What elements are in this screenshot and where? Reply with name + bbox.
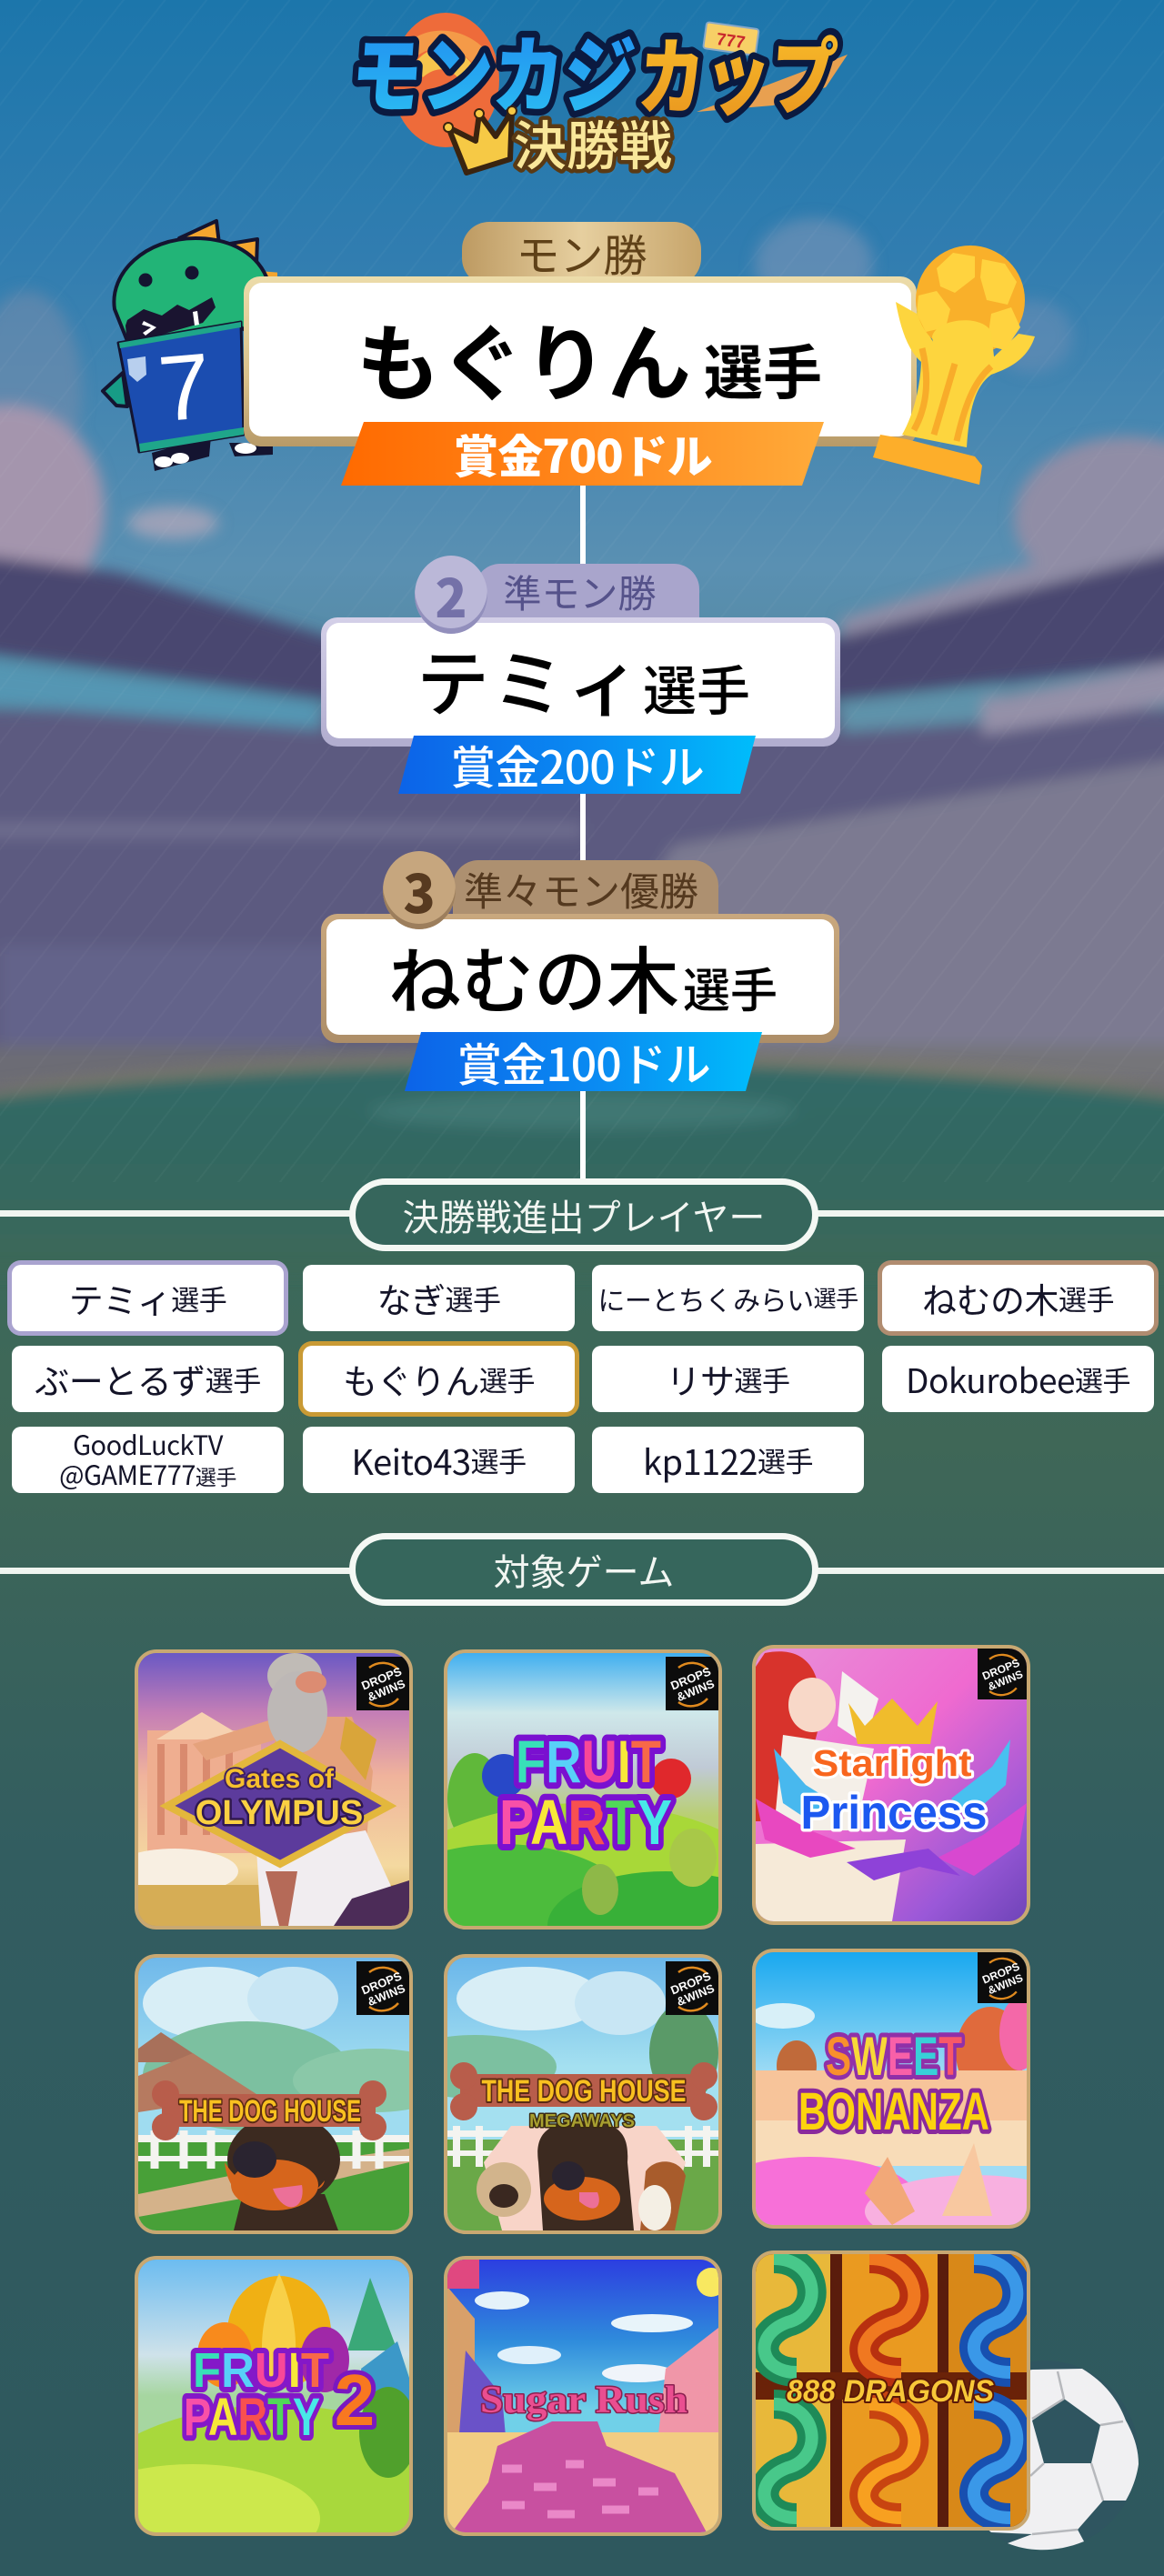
chip: Bootorozu: 選手 — [206, 1358, 261, 1399]
panel: finalist chips — [7, 1260, 1159, 1493]
badge: Drops & Wins: DROPS — [980, 1656, 1021, 1683]
third place name: ねむの木選手 — [388, 924, 778, 1029]
icon: gold trophy — [873, 246, 1035, 485]
chip: Risa — [592, 1346, 864, 1412]
chip: Nemunoki — [882, 1265, 1154, 1331]
game: Gates of Olympus: Gates of — [225, 1764, 335, 1794]
chip: Keito43: Keito43 — [351, 1435, 471, 1484]
logo slot reels: 777 — [715, 30, 747, 53]
heading: target games — [349, 1533, 818, 1606]
runner-up medal — [415, 556, 487, 634]
badge: Drops & Wins: &WINS — [675, 1677, 717, 1704]
winner prize banner — [341, 422, 824, 486]
badge: Drops & Wins — [356, 1657, 409, 1710]
game: The Dog House — [135, 1954, 413, 2234]
game: Fruit Party: FRUIT — [516, 1728, 661, 1795]
game: Sweet Bonanza — [752, 1949, 1030, 2229]
chip: Neetochiku Mirai — [592, 1265, 864, 1331]
chip: Risa: 選手 — [735, 1358, 789, 1399]
chip: Nemunoki: ねむの木 — [922, 1273, 1059, 1322]
third place prize banner: 賞金100ドル — [457, 1029, 710, 1095]
badge: Drops & Wins — [356, 1961, 409, 2015]
game: Starlight Princess — [752, 1645, 1030, 1925]
chip: Mogurin: 選手 — [479, 1358, 535, 1399]
game: The Dog House Megaways — [444, 1954, 722, 2234]
game: Sugar Rush: Sugar Rush — [480, 2380, 687, 2421]
chip: kp1122: 選手 — [758, 1439, 813, 1480]
chip: GoodLuckTV: GoodLuckTV — [73, 1424, 223, 1462]
chip: Temi: 選手 — [171, 1278, 226, 1318]
panel: runner-up card — [321, 617, 840, 747]
chip: GoodLuckTV: @GAME777選手 — [59, 1455, 236, 1493]
badge: Drops & Wins: &WINS — [986, 1971, 1025, 1997]
chip: Neetochiku Mirai: 選手 — [814, 1281, 858, 1314]
chip: kp1122: kp1122 — [643, 1435, 758, 1484]
game: The Dog House Megaways: MEGAWAYS — [529, 2111, 635, 2131]
badge: Drops & Wins: DROPS — [980, 1960, 1021, 1987]
game: Fruit Party 2: PARTY — [184, 2388, 320, 2447]
third place medal — [383, 851, 456, 929]
runner-up label pill: 準モン勝 — [503, 564, 657, 619]
logo slot reels — [703, 22, 759, 55]
game: Fruit Party — [444, 1649, 722, 1929]
winner name: もぐりん選手 — [356, 297, 822, 418]
chip: Mogurin: もぐりん — [343, 1353, 479, 1404]
game: Gates of Olympus: OLYMPUS — [196, 1794, 363, 1832]
badge: Drops & Wins — [666, 1961, 718, 2015]
game: Fruit Party 2: FRUIT — [193, 2343, 329, 2398]
runner-up medal: 2 — [435, 556, 467, 633]
icon: soccer ball — [989, 2369, 1139, 2550]
chip: Bootorozu: ぶーとるず — [35, 1353, 206, 1404]
chip: GoodLuckTV — [12, 1427, 284, 1493]
chip: Mogurin — [303, 1346, 575, 1412]
badge: Drops & Wins: DROPS — [359, 1664, 404, 1693]
chip: Neetochiku Mirai: にーとちくみらい — [597, 1278, 814, 1318]
game: Starlight Princess: Princess — [800, 1787, 988, 1839]
runner-up name: テミィ選手 — [416, 626, 750, 732]
chip: Dokurobee: 選手 — [1075, 1358, 1130, 1399]
badge: Drops & Wins — [978, 1649, 1027, 1699]
section divider: finalists — [0, 1210, 1164, 1217]
chip: Nagi — [303, 1265, 575, 1331]
badge: Drops & Wins — [666, 1657, 718, 1710]
winner label pill: モン勝 — [516, 220, 647, 284]
heading: target games: 対象ゲーム — [494, 1543, 674, 1596]
logo subtitle: 決勝戦 — [514, 104, 672, 180]
logo title text: モンカジ — [347, 8, 639, 130]
chip: Bootorozu — [12, 1346, 284, 1412]
winner prize banner: 賞金700ドル — [453, 421, 712, 486]
third place medal: 3 — [403, 852, 436, 928]
game: 888 Dragons — [752, 2250, 1030, 2531]
icon: green dinosaur mascot in jersey — [100, 218, 277, 471]
runner-up prize banner: 賞金200ドル — [450, 732, 704, 797]
chip: Temi — [12, 1265, 284, 1331]
chip: Nemunoki: 選手 — [1059, 1278, 1114, 1318]
badge: Drops & Wins: DROPS — [668, 1664, 713, 1693]
badge: Drops & Wins — [978, 1952, 1027, 2003]
badge: Drops & Wins: &WINS — [366, 1981, 407, 2009]
game: Fruit Party 2: 2 — [335, 2360, 375, 2441]
connector line — [580, 482, 586, 1182]
panel: third place card — [321, 914, 839, 1043]
panel: winner card — [244, 276, 917, 446]
game: Fruit Party 2 — [135, 2256, 413, 2536]
game: 888 Dragons: 888 DRAGONS — [787, 2374, 994, 2409]
badge: Drops & Wins: &WINS — [986, 1668, 1025, 1693]
runner-up prize banner — [398, 736, 756, 794]
section divider: games — [0, 1568, 1164, 1574]
chip: Keito43 — [303, 1427, 575, 1493]
game: Sugar Rush — [444, 2256, 722, 2536]
game: Gates of Olympus — [135, 1649, 413, 1929]
third place label pill: 準々モン優勝 — [464, 861, 698, 917]
third place prize banner — [405, 1032, 762, 1091]
logo: Monkaji Cup finals — [347, 8, 848, 180]
jersey number: 7 — [155, 334, 215, 441]
game: Starlight Princess: Starlight — [813, 1742, 972, 1784]
game: Fruit Party: PARTY — [499, 1787, 672, 1858]
logo title text — [347, 8, 841, 132]
chip: Dokurobee — [882, 1346, 1154, 1412]
badge: Drops & Wins: &WINS — [675, 1981, 717, 2009]
heading: finalists — [349, 1178, 818, 1251]
badge: Drops & Wins: &WINS — [366, 1677, 407, 1704]
winner label pill — [462, 222, 701, 286]
badge: Drops & Wins: DROPS — [668, 1969, 713, 1998]
heading: finalists: 決勝戦進出プレイヤー — [403, 1188, 765, 1241]
runner-up label pill — [475, 564, 699, 627]
chip: Nagi: 選手 — [446, 1278, 500, 1318]
chip: Keito43: 選手 — [471, 1439, 527, 1480]
chip: Temi: テミィ — [69, 1273, 171, 1322]
chip: Nagi: なぎ — [376, 1273, 446, 1322]
game: Sweet Bonanza: SWEET — [826, 2026, 962, 2087]
badge: Drops & Wins: DROPS — [359, 1969, 404, 1998]
logo crown — [444, 106, 517, 173]
chip: kp1122 — [592, 1427, 864, 1493]
chip: Risa: リサ — [666, 1353, 735, 1404]
chip: Dokurobee: Dokurobee — [906, 1354, 1075, 1403]
